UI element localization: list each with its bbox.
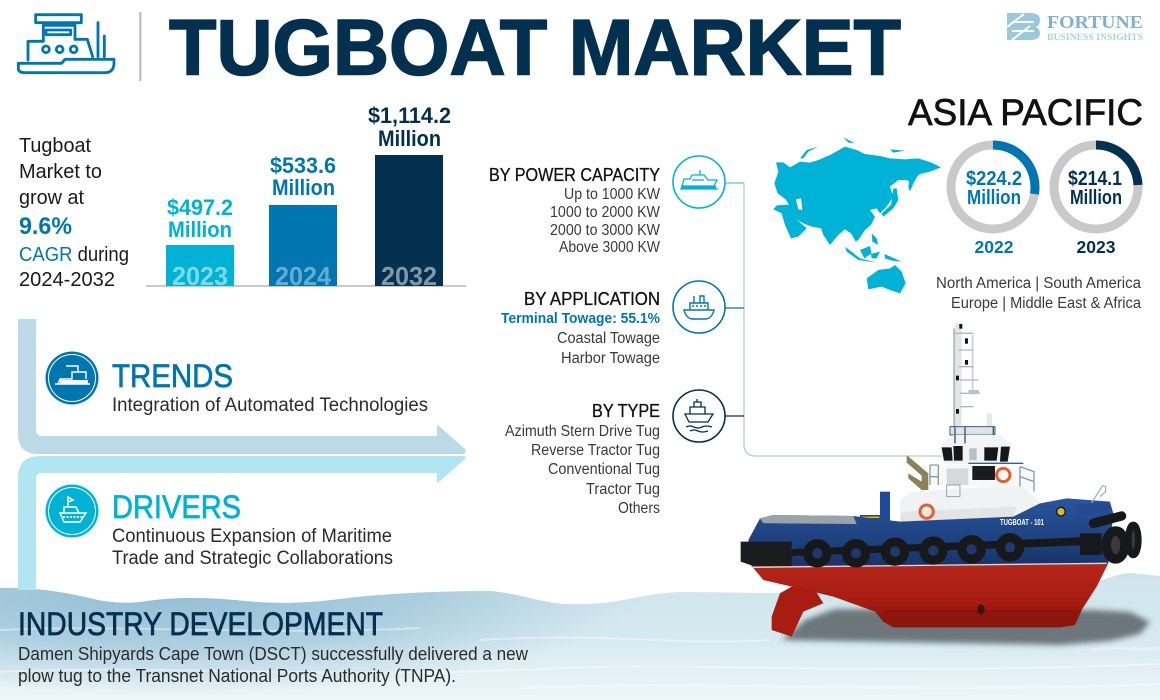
wheelhouse [940,427,1023,464]
segment: by type: Azimuth Stern Drive Tug [505,423,660,440]
bar 2032: Million [378,126,441,151]
bar 2023: Million [168,217,232,242]
map: asia pacific [773,137,941,293]
icon: type ship [673,390,725,442]
segment: by type: Others [618,500,660,517]
upper deck with rails [930,465,1034,497]
text: trends description: Integration of Automated Technologies [112,395,428,416]
bar 2032: 2032 [381,261,437,291]
text: drivers description: Trade and Strategic Collaborations [112,548,393,569]
donut chart: 2022: $224.2 [966,168,1022,190]
bow tyres [1106,525,1138,559]
bow fender block [1080,533,1102,555]
heading: industry development: INDUSTRY DEVELOPMENT [18,606,383,642]
segment: by power capacity: BY POWER CAPACITY [489,165,660,185]
heading: asia pacific: ASIA PACIFIC [908,92,1143,133]
CAGR text block: Tugboat [19,134,91,157]
segment: by application [501,289,660,367]
text: industry development description: plow tug to the Transnet National Ports Authority (TNPA). [18,665,456,686]
deck equipment and bollard [860,492,890,523]
ship shadow [782,609,1150,645]
illustration: tugboat [741,323,1138,637]
icon: trends badge [46,352,98,404]
title: TUGBOAT MARKET [169,2,901,92]
text: drivers description [112,526,393,569]
donut chart: 2023: Million [1070,187,1122,209]
bar 2032: $1,114.2 [368,103,451,128]
life ring: upper [997,468,1010,482]
icon: power capacity ship [673,156,725,208]
segment: by application: Coastal Towage [557,330,660,347]
segment: by application: BY APPLICATION [524,289,660,309]
segment: by application: Harbor Towage [561,350,660,367]
rudder and propeller [772,587,823,637]
donut chart: 2023 [1054,145,1138,257]
CAGR text block: 2024-2032 [19,268,115,291]
logo: Fortune Business Insights: FORTUNE [1047,12,1143,32]
lower superstructure [900,485,1040,522]
logo: Fortune Business Insights: BUSINESS INSIGHTS [1047,33,1143,43]
mast [950,323,995,435]
bow bracket [1092,486,1106,503]
connector lines [725,183,945,456]
side tyres [808,538,1020,563]
heading: trends: TRENDS [112,358,233,394]
text: drivers description: Continuous Expansion of Maritime [112,526,392,547]
header icon: tugboat outline [18,15,114,73]
CAGR text block: 9.6% [19,213,72,240]
icon: application ship [673,281,725,333]
bar 2023 [166,195,234,291]
text: industry development description: Damen Shipyards Cape Town (DSCT) successfully delivered a new [18,643,529,664]
bar 2024: Million [272,175,335,200]
bar chart: market size [146,103,466,291]
text: other regions: Europe | Middle East & Africa [951,295,1141,312]
segment: by type: Conventional Tug [548,461,660,478]
text: industry development description [18,643,529,686]
segment: by type: BY TYPE [592,401,660,421]
CAGR text block: CAGR during [19,243,129,266]
segment: by power capacity: 2000 to 3000 KW [550,222,660,239]
CAGR text block: grow at [19,186,84,209]
heading: drivers: DRIVERS [112,489,241,525]
segment: by type: Tractor Tug [586,481,660,498]
CAGR text block [19,134,129,291]
rub rail [792,537,1082,556]
segment: by power capacity: Up to 1000 KW [564,186,660,203]
blue upper hull [748,498,1113,567]
text: other regions [936,275,1141,312]
segment: by type: Reverse Tractor Tug [531,442,660,459]
life ring: lower [920,505,933,518]
icon: drivers badge [46,484,98,538]
bar 2023: $497.2 [167,195,233,220]
logo: Fortune Business Insights [1007,12,1143,43]
segment: by power capacity [489,165,660,256]
red lower hull [752,563,1108,627]
deck inside [760,515,857,524]
segment: by type [505,401,660,517]
stern fender [741,542,792,566]
bar 2032 [368,103,451,291]
bar 2024: $533.6 [270,153,336,178]
segment: by power capacity: Above 3000 KW [559,239,660,256]
donut chart: 2023: $214.1 [1068,168,1122,190]
header divider [139,12,142,81]
text: other regions: North America | South America [936,275,1141,292]
arrow: drivers [18,456,466,590]
bar 2024: 2024 [275,261,332,291]
segment: by power capacity: 1000 to 2000 KW [550,204,660,221]
donut chart: 2022: Million [967,187,1021,209]
water background [0,573,1160,700]
segment: by application: Terminal Towage: 55.1% [501,311,660,327]
CAGR text block: Market to [19,160,102,183]
bar 2024 [269,153,337,291]
yellow hatch [1057,507,1065,516]
bar 2023: 2023 [172,261,228,291]
hull name: TUGBOAT - 101 [1000,518,1044,527]
donut chart: 2023: 2023 [1077,237,1116,257]
exhaust pipes [907,455,928,490]
donut chart: 2022: 2022 [975,237,1014,257]
arrow: trends [18,319,466,454]
donut chart: 2022 [951,145,1035,257]
